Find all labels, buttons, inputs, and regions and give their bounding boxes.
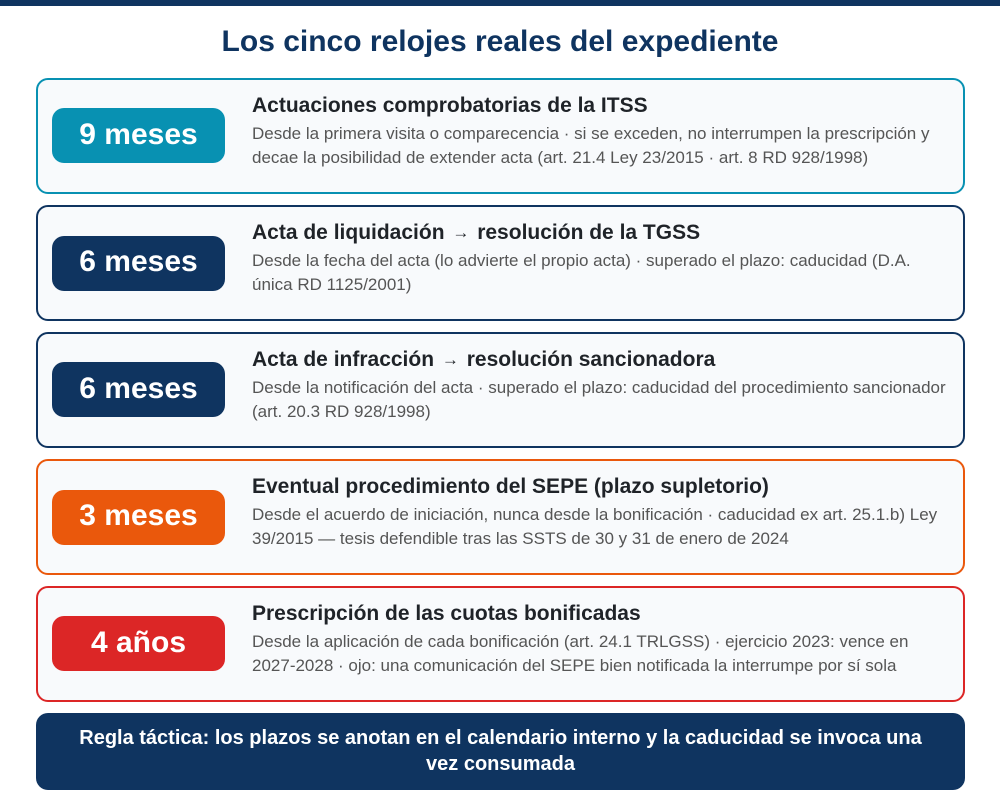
callout: regla táctica: vez consumada [426,753,575,775]
badge: 3 meses [52,490,225,545]
heading: prescripción de las cuotas: Prescripción de las cuotas bonificadas [252,602,641,625]
text: acta de liquidación: única RD 1125/2001) [252,275,411,294]
panel: prescripción de las cuotas [36,586,965,702]
badge: 4 años: 4 años [91,626,186,659]
badge: 6 meses liquidación: 6 meses [79,245,198,278]
heading: acta de infracción: Acta de infracción → resolución sancionadora [252,348,715,371]
title: Los cinco relojes reales del expediente [222,25,778,58]
text: prescripción de las cuotas [252,632,908,675]
text: procedimiento del SEPE [252,505,937,548]
badge: 9 meses [52,108,225,163]
callout: regla táctica [36,713,965,790]
text: acta de liquidación [252,251,911,294]
text: acta de infracción [252,378,946,421]
badge: 4 años [52,616,225,671]
text: procedimiento del SEPE: Desde el acuerdo de iniciación, nunca desde la bonificación · caducidad ex art. 25.1.b) Ley [252,505,937,524]
badge: 9 meses: 9 meses [79,118,198,151]
text: actuaciones comprobatorias: Desde la primera visita o comparecencia · si se exceden, no interrumpen la prescripción y [252,124,929,143]
panel: acta de liquidación [36,205,965,321]
text: procedimiento del SEPE: 39/2015 — tesis defendible tras las SSTS de 30 y 31 de enero de 2024 [252,529,789,548]
text: prescripción de las cuotas: 2027-2028 · ojo: una comunicación del SEPE bien notificada la interrumpe por sí sola [252,656,896,675]
panel: procedimiento del SEPE [36,459,965,575]
badge: 6 meses infracción [52,362,225,417]
heading: actuaciones comprobatorias: Actuaciones comprobatorias de la ITSS [252,94,648,117]
text: acta de liquidación: Desde la fecha del acta (lo advierte el propio acta) · superado el plazo: caducidad (D.A. [252,251,911,270]
badge: 3 meses: 3 meses [79,499,198,532]
panel: acta de infracción [36,332,965,448]
text: prescripción de las cuotas: Desde la aplicación de cada bonificación (art. 24.1 TRLGSS) · ejercicio 2023: vence en [252,632,908,651]
top bar [0,0,1000,6]
text: acta de infracción: Desde la notificación del acta · superado el plazo: caducidad del procedimiento sancionador [252,378,946,397]
badge: 6 meses infracción: 6 meses [79,372,198,405]
heading: acta de liquidación: Acta de liquidación → resolución de la TGSS [252,221,700,244]
text: actuaciones comprobatorias: decae la posibilidad de extender acta (art. 21.4 Ley 23/2015 · art. 8 RD 928/1998) [252,148,868,167]
text: acta de infracción: (art. 20.3 RD 928/1998) [252,402,431,421]
panel: actuaciones comprobatorias [36,78,965,194]
callout: regla táctica: Regla táctica: los plazos se anotan en el calendario interno y la caducidad se invoca una [79,727,922,749]
text: actuaciones comprobatorias [252,124,930,167]
badge: 6 meses liquidación [52,236,225,291]
heading: procedimiento del SEPE: Eventual procedimiento del SEPE (plazo supletorio) [252,475,769,498]
